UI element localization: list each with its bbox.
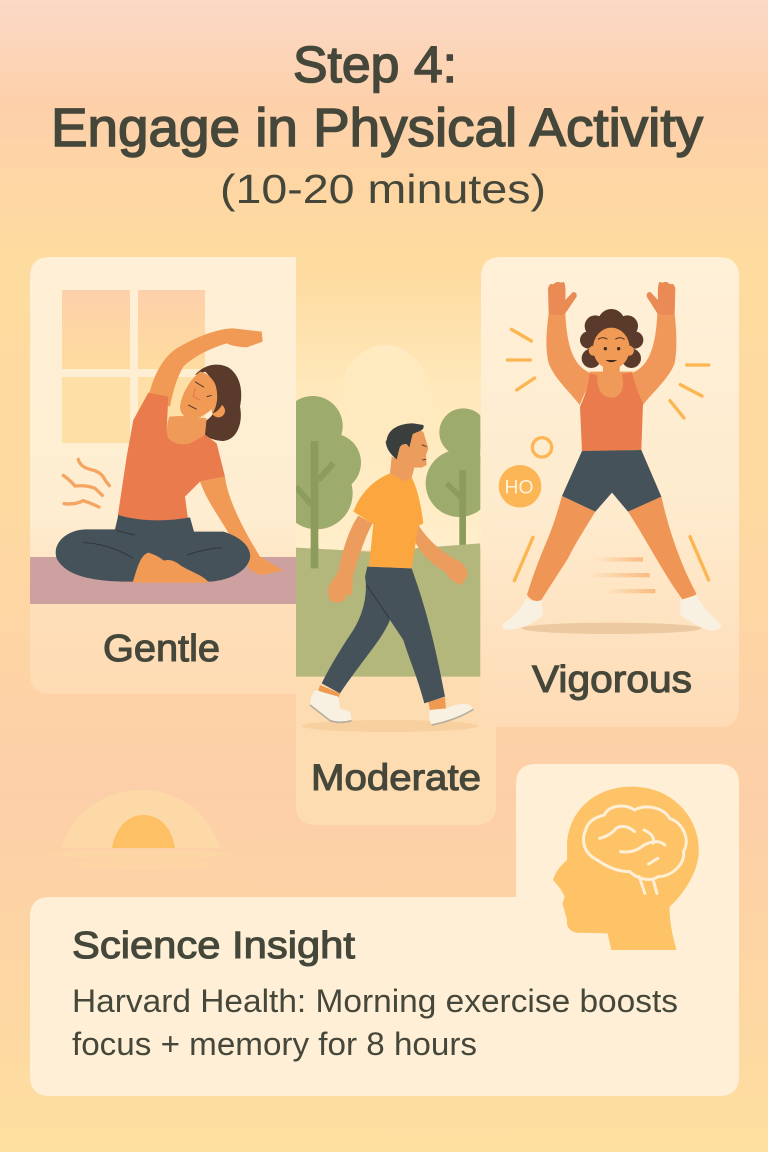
subtitle: duration: (10-20 minutes) bbox=[220, 166, 546, 212]
sun bbox=[112, 815, 175, 848]
card base bbox=[296, 540, 496, 825]
horizon streaks bbox=[50, 850, 230, 858]
card bbox=[30, 257, 296, 694]
illustration: seated side stretch bbox=[56, 328, 283, 583]
stretching arm bbox=[148, 328, 263, 407]
face bbox=[180, 372, 220, 419]
hair back bbox=[195, 365, 241, 441]
yoga mat bbox=[30, 557, 296, 604]
label: gentle: Gentle bbox=[103, 628, 220, 670]
panel: moderate bbox=[296, 306, 496, 825]
body text: Harvard Health: Morning exercise boosts bbox=[72, 983, 678, 1019]
card bbox=[481, 257, 739, 727]
decorative sunrise bbox=[50, 790, 230, 870]
illustration: park and walking man bbox=[296, 396, 480, 732]
left tree bbox=[296, 396, 361, 549]
label: moderate: Moderate bbox=[311, 757, 481, 798]
badge: HO: HO bbox=[504, 477, 533, 498]
right tree bbox=[426, 408, 480, 545]
ring bbox=[532, 438, 552, 457]
card bbox=[30, 764, 739, 1096]
ground bbox=[296, 543, 480, 677]
title bbox=[51, 36, 703, 212]
sky bbox=[296, 270, 481, 550]
trousers bbox=[56, 515, 250, 582]
panel: science insight bbox=[30, 764, 739, 1096]
panel: gentle bbox=[30, 257, 296, 694]
body text: focus + memory for 8 hours bbox=[72, 1026, 477, 1062]
badge: HO bbox=[499, 465, 541, 508]
body text bbox=[72, 983, 678, 1062]
neck bbox=[167, 416, 207, 444]
figure bbox=[502, 282, 721, 630]
title line: engage in physical activity: Engage in Physical Activity bbox=[51, 98, 703, 158]
illustration: jumping jack bbox=[499, 282, 721, 634]
walking man bbox=[310, 423, 473, 725]
supporting arm bbox=[200, 477, 283, 575]
movement squiggles bbox=[63, 459, 109, 507]
ground shadow bbox=[302, 720, 478, 732]
speed lines bbox=[588, 557, 655, 593]
sun halo bbox=[62, 790, 220, 848]
panel: vigorous bbox=[481, 257, 739, 727]
energy lines bbox=[507, 329, 709, 581]
heading: science insight: Science Insight bbox=[72, 925, 355, 967]
title line: step number: Step 4: bbox=[293, 36, 457, 93]
shirt bbox=[118, 393, 225, 523]
sun behind the park bbox=[339, 345, 431, 450]
feet bbox=[133, 553, 209, 583]
ground shadow bbox=[521, 623, 701, 634]
icon: head with brain bbox=[553, 787, 699, 950]
window bbox=[62, 290, 205, 443]
label: vigorous: Vigorous bbox=[532, 659, 692, 701]
